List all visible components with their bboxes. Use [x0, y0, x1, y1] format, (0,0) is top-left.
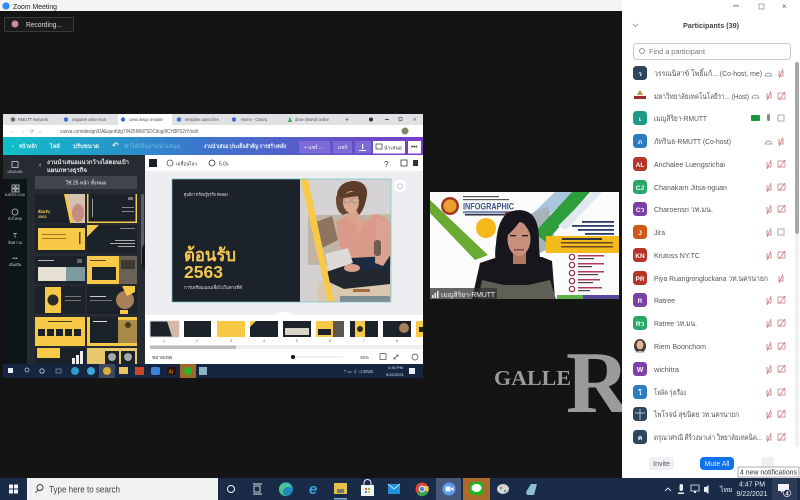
watermark: GALLER	[494, 335, 631, 432]
icon: zoom	[436, 478, 461, 500]
window controls	[733, 2, 787, 11]
Canva icon sidebar: อัปโหลด	[8, 216, 23, 221]
address bar: ⌂	[39, 129, 42, 135]
icon: notepad app	[526, 484, 537, 495]
participant row 5	[633, 157, 785, 171]
icon: paint app	[497, 484, 509, 494]
Canva toolbar: ไฟล์	[49, 142, 61, 150]
editor toolbar	[145, 155, 423, 171]
system tray: ไทย	[719, 485, 732, 494]
invite button: Invite	[653, 461, 670, 468]
address bar: ←	[10, 129, 15, 135]
Canva icon sidebar: องค์ประกอบ	[5, 192, 26, 197]
shared screen taskbar: AI	[168, 370, 173, 376]
panel heading: Participants (39)	[683, 21, 739, 30]
participant row 11: Ratree	[654, 296, 675, 305]
system tray: 9/22/2021	[736, 491, 768, 498]
presenter name tag	[430, 288, 497, 299]
shared screen taskbar: 9/22/2021	[386, 372, 405, 377]
slide: welcome 2563: ต้อนรับ	[184, 245, 236, 265]
browser tabs	[3, 114, 423, 125]
search box: Type here to search	[49, 484, 120, 494]
page thumbnail strip: 8	[396, 338, 399, 343]
page thumbnail strip: 4	[263, 338, 266, 343]
window controls: ×	[782, 2, 787, 11]
start button	[9, 484, 18, 494]
mute all button	[700, 457, 734, 470]
participant row 7: Cว	[636, 207, 645, 214]
participant row 1: วรรณนิสาข์ โพธิ์แก้... (Co-host, me)	[654, 68, 762, 78]
slide: welcome 2563	[172, 179, 406, 302]
notification center	[772, 478, 797, 500]
participant row 2: มหาวิทยาลัยเทคโนโลยีรา... (Host)	[654, 92, 749, 101]
participant row 12: Ratree วท.มน.	[654, 319, 697, 328]
editor bottom bar: หมายเหตุ	[152, 355, 172, 361]
task view	[253, 484, 262, 494]
paper and hand	[325, 248, 353, 271]
participant row 10: PR	[635, 276, 645, 283]
editor toolbar: ?	[384, 160, 389, 169]
icon: chrome	[416, 482, 429, 496]
mute all button: Mute All	[705, 461, 730, 468]
participant row 14	[633, 362, 785, 376]
participant row 5: Anchalee Luengsrichai	[654, 160, 725, 169]
tooltip: notifications	[738, 467, 799, 477]
browser tabs: +	[345, 117, 349, 124]
participant row 14: W	[637, 367, 644, 374]
address bar: canva.com/design/DAEqunKdg7I/425IWd7SDCdog/9CH3PS2rY/edit	[60, 129, 199, 135]
page thumbnail strip: 6	[329, 338, 332, 343]
icon: store	[361, 480, 374, 496]
panel: participants	[622, 0, 800, 478]
Canva icon sidebar: เพิ่มเติม	[9, 262, 22, 267]
editor canvas background	[145, 171, 423, 320]
Canva toolbar: ปรับขนาด	[73, 142, 99, 150]
browser tabs: RMUTT Network	[18, 117, 49, 122]
system tray	[665, 482, 768, 498]
participant row 13	[634, 339, 785, 353]
participant row 6: Chanakarn Jitsa-nguan	[654, 183, 727, 192]
search box: Find a participant	[649, 47, 706, 56]
Canva toolbar: •••	[411, 144, 417, 150]
participant row 1: ว	[638, 71, 642, 78]
scrollbar	[795, 62, 799, 447]
recording indicator: Recording...	[26, 20, 62, 29]
template panel: ‹	[39, 162, 42, 169]
participant row 15: โฟล์ค รุ่งเรือง	[654, 388, 686, 397]
editor toolbar: เคลื่อนไหว	[176, 160, 197, 168]
editor bottom bar	[145, 350, 423, 364]
Canva icon sidebar: ข้อความ	[8, 240, 23, 245]
Canva toolbar: ‹	[12, 144, 14, 150]
template thumbnails: ต้อนรับ	[38, 208, 50, 214]
participant row 9: Krutoss NY.TC	[654, 251, 701, 260]
search box	[634, 44, 790, 60]
browser tabs: Home - Canva	[241, 117, 267, 122]
participant row 17: ค	[638, 435, 642, 442]
participant row 11	[633, 293, 785, 307]
Canva toolbar: ↶	[111, 141, 119, 150]
participant row 3: เมญสิริยา-RMUTT	[654, 114, 707, 123]
participant row 6: CJ	[636, 185, 645, 192]
participant row 12	[633, 316, 785, 330]
page thumbnail strip: 7	[363, 338, 366, 343]
title bar: Zoom Meeting	[13, 2, 57, 11]
participant row 13: Riem Boonchom	[654, 342, 706, 351]
legs	[328, 258, 390, 289]
Canva icon sidebar: T	[13, 233, 18, 240]
windows taskbar	[0, 478, 800, 500]
participant row 11: R	[638, 298, 643, 305]
browser tabs: template canva free	[185, 117, 219, 122]
slide: welcome 2563: การเตรียมแผนเพื่อไปในทางที่ดี	[184, 284, 242, 290]
participant row 17: ดรุณาศรณี ศิริวงษาเล่า วิทยาลัยเทคนิค...	[654, 433, 762, 442]
participant row 10	[633, 271, 783, 285]
participant row 8: Jira	[654, 228, 666, 237]
recording indicator	[4, 18, 74, 32]
notification center: 4	[785, 491, 789, 497]
page thumbnail strip: 2	[196, 338, 199, 343]
page thumbnail strip: 1	[163, 338, 166, 343]
page thumbnail strip: 5	[296, 338, 299, 343]
panel heading	[633, 21, 739, 30]
template panel: แผนกทางธุรกิจ	[47, 166, 88, 174]
presenter	[472, 210, 556, 299]
Canva toolbar: + แชร์ ...	[304, 144, 323, 151]
title bar	[0, 0, 800, 11]
infographic banner behind presenter	[430, 192, 619, 299]
tooltip: notifications: 4 new notifications	[740, 470, 797, 476]
participant row 15: โ	[637, 388, 642, 397]
participant row 16	[633, 407, 785, 421]
shared screen taskbar: 4:46 PM	[388, 365, 403, 370]
system tray: 4:47 PM	[739, 482, 765, 488]
watermark: GALLER: GALLE	[494, 366, 571, 390]
participant row 7: Charoensri วท.มน.	[654, 205, 713, 214]
page thumbnail strip	[145, 312, 423, 350]
address bar	[3, 125, 423, 137]
participant row 14: wichitra	[653, 365, 680, 374]
participant row 3	[633, 111, 784, 125]
participant row 10: Piya Ruangrongluckana วท.นครนายก	[654, 274, 768, 283]
cortana	[228, 486, 234, 492]
icon: line	[463, 478, 490, 500]
Canva toolbar: นำเสนอ	[384, 146, 402, 152]
presenter name tag: เมญสิริยา-RMUTT	[441, 291, 496, 299]
participant row 15	[633, 385, 785, 399]
icon: ie: e	[309, 481, 317, 498]
Canva toolbar: แชร์	[338, 144, 348, 151]
participant row 12: Rว	[636, 321, 645, 328]
page thumbnail strip: 3	[230, 338, 233, 343]
browser tabs: canva design template	[129, 117, 163, 122]
shared screen: browser with Canva	[3, 114, 423, 378]
participant rows	[633, 66, 785, 444]
participant row 1	[633, 66, 783, 80]
infographic banner behind presenter: INFOGRAPHIC	[463, 202, 514, 212]
Canva icon sidebar	[3, 155, 27, 364]
participant row 5: AL	[636, 162, 644, 169]
participant row 16: ไพโรจน์ สุขนิตย วท.นครนายก	[653, 410, 739, 419]
more button	[761, 457, 774, 470]
Canva toolbar	[3, 137, 423, 155]
participant row 7	[633, 202, 785, 216]
editor toolbar: 5.0s	[219, 162, 229, 168]
participant row 4	[633, 134, 783, 148]
address bar: →	[20, 129, 25, 135]
browser tabs: ×	[413, 118, 417, 124]
template panel	[27, 155, 145, 364]
webcam video: presenter	[430, 192, 619, 299]
participant row 8: J	[638, 230, 642, 237]
browser tabs: drive shared online	[295, 117, 329, 122]
slide: welcome 2563: ศูนย์การเรียนรู้ธุรกิจ ทดลอง	[184, 191, 228, 198]
template panel: ใช้ 25 หน้า ทั้งหมด	[66, 178, 106, 186]
participant row 3: เ	[639, 116, 641, 123]
head	[347, 210, 359, 220]
Canva toolbar: งานนำเสนอ ประเด็นสำคัญ การสร้างหลัง	[204, 142, 286, 150]
participant row 9	[633, 248, 785, 262]
editor bottom bar: 35%	[360, 355, 369, 360]
Canva toolbar: หน้าหลัก	[19, 142, 38, 150]
icon: mail	[388, 484, 400, 494]
shared screen taskbar	[3, 364, 423, 378]
participant row 8	[633, 225, 784, 239]
template thumbnails: 2563	[38, 215, 46, 219]
Canva toolbar: ทำให้เป็นงานนำเสนอ	[124, 142, 180, 150]
template panel: งานนำเสนอแนวกว้างไล่ตอนเป้า	[47, 158, 129, 166]
icon: edge	[279, 482, 293, 496]
slide photo	[300, 179, 391, 302]
icon: file explorer	[334, 483, 347, 500]
browser tabs: magazine online rmutt	[72, 117, 107, 122]
template thumbnails	[35, 194, 137, 364]
invite button	[649, 457, 674, 470]
watermark: GALLER: R	[566, 335, 631, 432]
search box	[27, 478, 218, 500]
participant row 9: KN	[635, 253, 645, 260]
shared screen taskbar: ^ ▭ ⏚ ◁ ENG	[344, 368, 374, 374]
Canva icon sidebar: •••	[12, 256, 18, 262]
participant row 4: ภัทรินธ-RMUTT (Co-host)	[654, 137, 731, 146]
participant row 4: ภ	[638, 139, 642, 146]
participant row 17	[633, 430, 785, 444]
participant row 6	[633, 180, 785, 194]
participant row 2	[634, 90, 785, 101]
Canva icon sidebar: เทมเพลต	[8, 170, 23, 174]
address bar: ⟳	[30, 129, 35, 135]
torso	[336, 214, 388, 258]
slide: welcome 2563: 2563	[184, 262, 223, 282]
